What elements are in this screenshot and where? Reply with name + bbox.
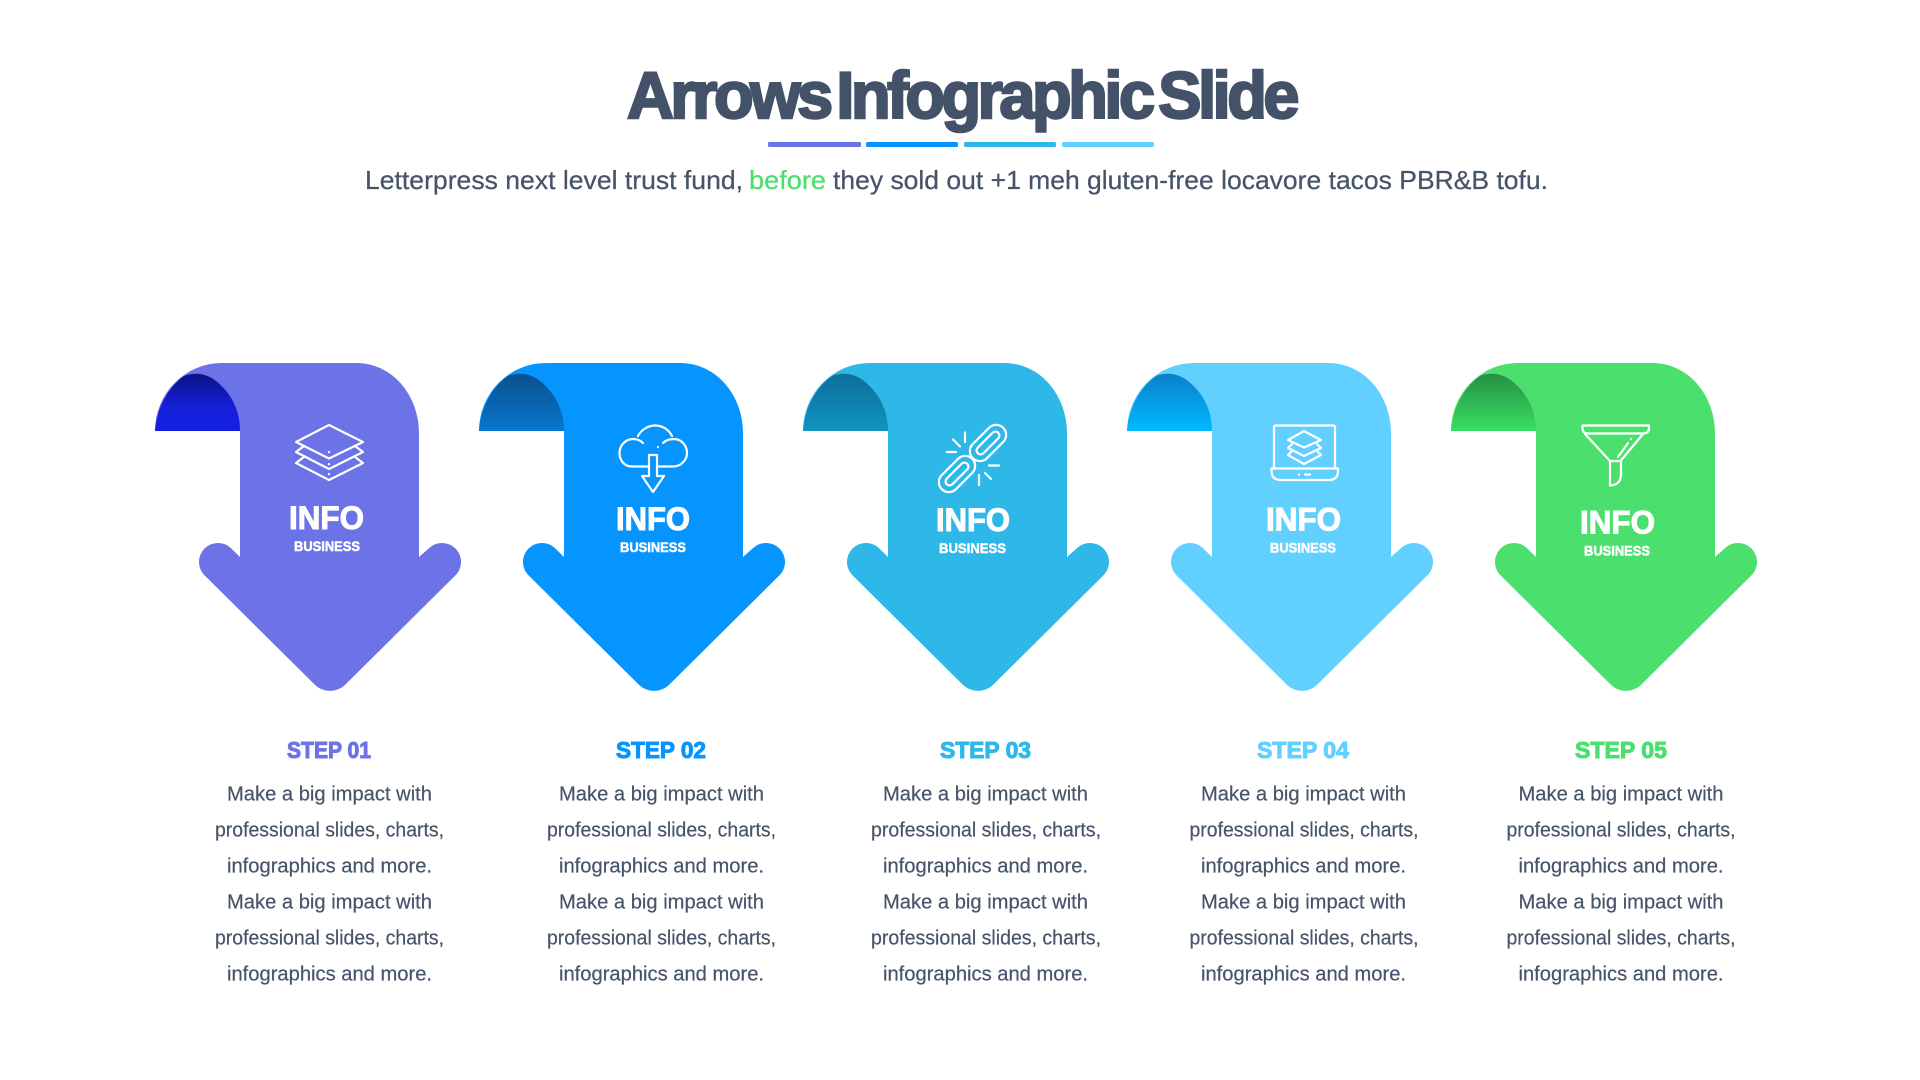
body: step 04: infographics and more.: [1201, 856, 1406, 878]
icon: broken chain link: [935, 421, 1010, 496]
label: INFO: INFO: [936, 502, 1010, 538]
body: step 03: professional slides, charts,: [871, 820, 1101, 842]
heading: step 02: STEP 02: [616, 737, 706, 763]
body: step 03: professional slides, charts,: [871, 928, 1101, 950]
arrow shape 3: [803, 363, 1109, 691]
arrow shape 1: [155, 363, 461, 691]
subtitle: before: [749, 165, 826, 195]
panel: arrow 4: [1127, 363, 1433, 691]
body: step 01: professional slides, charts,: [215, 928, 444, 950]
body: step 01: Make a big impact with: [227, 892, 432, 914]
body: step 03: infographics and more.: [883, 964, 1088, 986]
heading: step 05: STEP 05: [1575, 737, 1667, 763]
body: step 02: [547, 784, 776, 986]
subtitle: Letterpress next level trust fund,: [365, 165, 743, 195]
body: step 05: infographics and more.: [1518, 964, 1724, 986]
curl fold 5: [1451, 374, 1536, 431]
panel: arrow 1: [155, 363, 461, 691]
body: step 02: infographics and more.: [559, 856, 764, 878]
title underline bars: [768, 142, 1154, 147]
arrow shape 4: [1127, 363, 1433, 691]
body: step 01: infographics and more.: [227, 856, 432, 878]
curl fold 3: [803, 374, 888, 431]
label: INFO: INFO: [1580, 504, 1655, 540]
text block: step 03: [871, 737, 1101, 986]
text block: step 01: [215, 737, 444, 986]
body: step 04: professional slides, charts,: [1190, 928, 1418, 950]
curl fold 2: [479, 374, 564, 431]
icon: laptop with layers: [1272, 426, 1338, 480]
subtitle: they sold out +1 meh gluten-free locavore tacos PBR&B tofu.: [833, 165, 1548, 195]
body: step 03: [871, 784, 1101, 986]
body: step 02: Make a big impact with: [559, 784, 764, 806]
label: INFO: INFO: [1266, 502, 1341, 538]
label: BUSINESS: BUSINESS: [1270, 540, 1336, 556]
curl fold 1: [155, 374, 240, 431]
subtitle: [365, 165, 1548, 195]
body: step 05: [1506, 784, 1736, 986]
label: BUSINESS: BUSINESS: [620, 539, 686, 555]
body: step 04: [1190, 784, 1418, 986]
arrow shape 2: [479, 363, 785, 691]
label: BUSINESS: BUSINESS: [294, 538, 360, 554]
body: step 05: professional slides, charts,: [1506, 820, 1736, 842]
title: Arrows Infographic Slide: [627, 58, 1298, 132]
body: step 05: Make a big impact with: [1518, 892, 1724, 914]
panel: arrow 2: [479, 363, 785, 691]
body: step 04: Make a big impact with: [1201, 892, 1406, 914]
body: step 05: Make a big impact with: [1518, 784, 1724, 806]
label: BUSINESS: BUSINESS: [939, 540, 1006, 556]
label: BUSINESS: BUSINESS: [1584, 542, 1650, 558]
body: step 03: infographics and more.: [883, 856, 1088, 878]
label: INFO: INFO: [616, 501, 690, 537]
body: step 01: infographics and more.: [227, 964, 432, 986]
body: step 02: infographics and more.: [559, 964, 764, 986]
icon: layers: [296, 425, 363, 480]
icon: cloud download: [620, 426, 687, 492]
icon: funnel: [1582, 426, 1649, 486]
body: step 04: Make a big impact with: [1201, 784, 1406, 806]
body: step 03: Make a big impact with: [883, 892, 1088, 914]
body: step 02: professional slides, charts,: [547, 928, 776, 950]
body: step 03: Make a big impact with: [883, 784, 1088, 806]
body: step 04: professional slides, charts,: [1190, 820, 1418, 842]
body: step 05: infographics and more.: [1518, 856, 1724, 878]
text block: step 02: [547, 737, 776, 986]
body: step 05: professional slides, charts,: [1506, 928, 1736, 950]
body: step 01: Make a big impact with: [227, 784, 432, 806]
heading: step 03: STEP 03: [940, 737, 1031, 763]
body: step 02: professional slides, charts,: [547, 820, 776, 842]
curl fold 4: [1127, 374, 1212, 431]
body: step 04: infographics and more.: [1201, 964, 1406, 986]
body: step 02: Make a big impact with: [559, 892, 764, 914]
body: step 01: [215, 784, 444, 986]
label: INFO: INFO: [289, 500, 364, 536]
body: step 01: professional slides, charts,: [215, 820, 444, 842]
text block: step 05: [1506, 737, 1736, 986]
text block: step 04: [1190, 737, 1418, 986]
heading: step 01: STEP 01: [287, 737, 371, 763]
panel: arrow 5: [1451, 363, 1757, 691]
panel: arrow 3: [803, 363, 1109, 691]
arrow shape 5: [1451, 363, 1757, 691]
heading: step 04: STEP 04: [1257, 737, 1349, 763]
